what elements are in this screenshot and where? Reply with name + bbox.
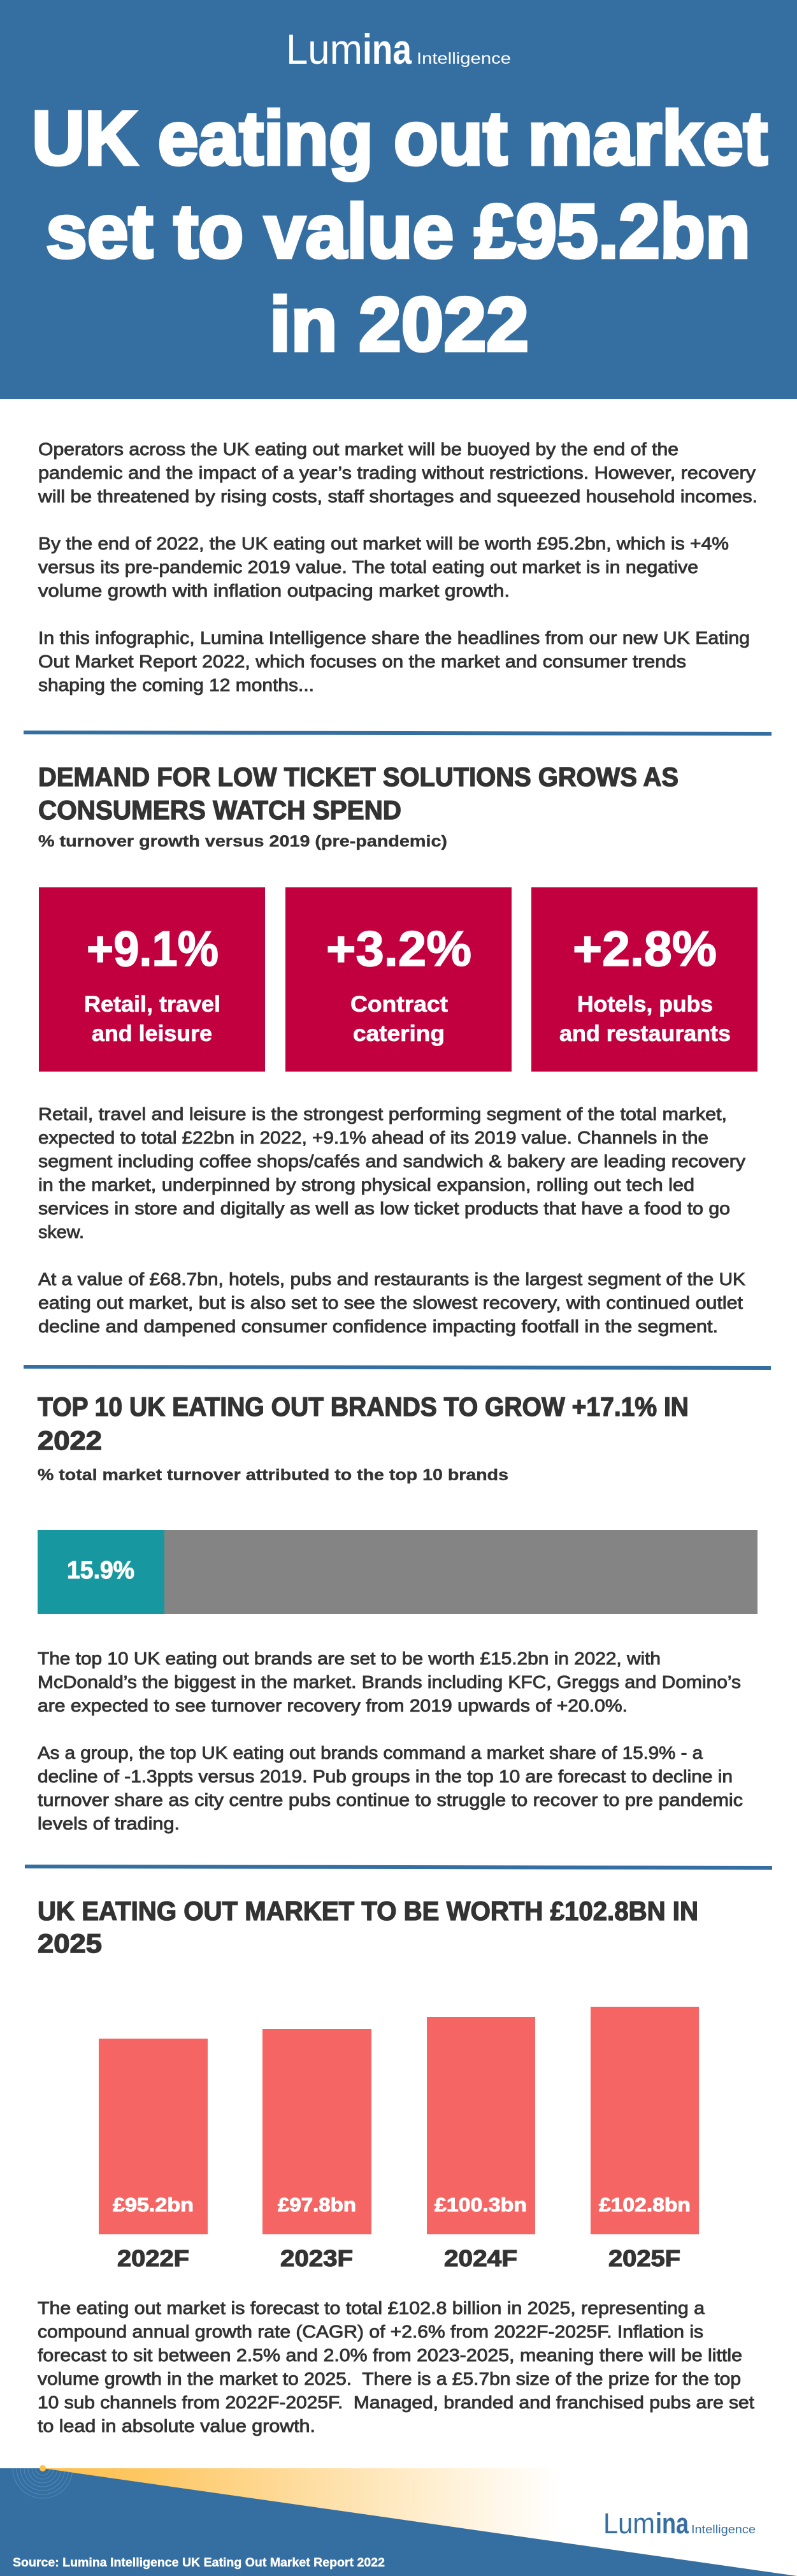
bar: 2025F: £102.8bn	[599, 2194, 691, 2216]
bar: 2022F: £95.2bn	[113, 2194, 194, 2216]
text block: segment commentary: eating out market, but is also set to see the slowest recovery, with continued outlet	[38, 1293, 743, 1313]
card: hotels, pubs and restaurants: +2.8%	[573, 921, 717, 977]
text block: forecast commentary: volume growth in the market to 2025. There is a £5.7bn size of the prize for the top	[38, 2369, 741, 2389]
text block: introduction: By the end of 2022, the UK eating out market will be worth £95.2bn, which is +4%	[38, 534, 729, 553]
title	[32, 96, 768, 367]
card: retail, travel and leisure	[39, 887, 265, 1072]
text block: brands commentary: turnover share as city centre pubs continue to struggle to recover to pre pandemic	[38, 1790, 743, 1810]
text block: brands commentary: As a group, the top UK eating out brands command a market share of 15.9% - a	[38, 1743, 703, 1763]
text block: introduction: Operators across the UK eating out market will be buoyed by the end of the	[38, 439, 679, 459]
card: contract catering: catering	[353, 1021, 445, 1046]
heading: market forecast	[38, 1896, 698, 1958]
card: hotels, pubs and restaurants	[531, 887, 758, 1072]
text block: introduction: Out Market Report 2022, which focuses on the market and consumer trends	[38, 651, 686, 671]
heading: demand for low ticket solutions: DEMAND FOR LOW TICKET SOLUTIONS GROWS AS	[38, 762, 679, 792]
bar: 2024F: £100.3bn	[434, 2194, 527, 2216]
card: contract catering	[285, 887, 512, 1072]
logo: Lumina Intelligence: Lum	[286, 25, 363, 73]
chart: market share bar	[38, 1530, 758, 1614]
source note: Source: Lumina Intelligence UK Eating Out Market Report 2022	[13, 2556, 385, 2570]
heading: demand for low ticket solutions: CONSUMERS WATCH SPEND	[38, 795, 401, 825]
title: UK eating out market	[32, 96, 768, 181]
icon: concentric circles	[13, 2468, 73, 2499]
heading: top 10 brands: 2022	[38, 1425, 102, 1455]
title: in 2022	[269, 282, 529, 367]
bar: 2023F: 2023F	[280, 2245, 353, 2271]
logo: Lumina Intelligence	[286, 25, 511, 73]
text block: brands commentary: decline of -1.3ppts versus 2019. Pub groups in the top 10 are forecast to decline in	[38, 1766, 733, 1786]
text block: introduction: versus its pre-pandemic 2019 value. The total eating out market is in negative	[38, 557, 698, 577]
bar: 2023F: £97.8bn	[278, 2194, 356, 2216]
text block: introduction: pandemic and the impact of a year’s trading without restrictions. However, recovery	[38, 463, 756, 483]
text block: forecast commentary: 10 sub channels from 2022F-2025F. Managed, branded and franchised pubs are set	[38, 2392, 754, 2412]
logo: footer Lumina Intelligence: Intelligence	[691, 2523, 756, 2536]
text block: segment commentary: At a value of £68.7bn, hotels, pubs and restaurants is the largest segment of the UK	[38, 1269, 745, 1289]
panel: footer	[0, 2465, 797, 2576]
text block: segment commentary: skew.	[38, 1222, 84, 1242]
title: set to value £95.2bn	[46, 189, 750, 274]
logo: Lumina Intelligence: Intelligence	[417, 50, 511, 68]
text block: brands commentary: McDonald’s the biggest in the market. Brands including KFC, Greggs and Domino’s	[38, 1672, 741, 1692]
text block: introduction: will be threatened by rising costs, staff shortages and squeezed household incomes.	[38, 486, 758, 506]
text block: introduction: shaping the coming 12 months...	[38, 675, 314, 695]
text block: introduction: In this infographic, Lumina Intelligence share the headlines from our new UK Eating	[38, 628, 750, 648]
card: retail, travel and leisure: +9.1%	[87, 921, 219, 977]
bar: 2024F	[427, 2017, 535, 2271]
card: retail, travel and leisure: Retail, travel	[84, 992, 220, 1017]
logo: footer Lumina Intelligence: Lum	[603, 2507, 655, 2540]
text block: segment commentary: decline and dampened consumer confidence impacting footfall in the segment.	[38, 1316, 718, 1336]
text block: introduction: volume growth with inflation outpacing market growth.	[38, 581, 510, 600]
panel: low ticket demand	[38, 762, 758, 1336]
logo: footer Lumina Intelligence: ina	[656, 2507, 689, 2540]
logo: Lumina Intelligence: ina	[363, 25, 412, 73]
logo: footer Lumina Intelligence	[603, 2507, 756, 2540]
panel: market forecast	[38, 1896, 754, 2436]
subheading: % turnover growth versus 2019 (pre-pandemic)	[38, 833, 447, 850]
text block: forecast commentary	[38, 2298, 754, 2436]
text block: segment commentary	[38, 1104, 745, 1336]
text block: introduction	[38, 439, 758, 695]
text block: forecast commentary: to lead in absolute value growth.	[38, 2416, 315, 2436]
heading: market forecast: UK EATING OUT MARKET TO BE WORTH £102.8BN IN	[38, 1896, 698, 1926]
card: retail, travel and leisure: and leisure	[92, 1021, 212, 1046]
heading: market forecast: 2025	[38, 1928, 102, 1958]
card: hotels, pubs and restaurants: and restaurants	[559, 1021, 731, 1046]
text block: segment commentary: expected to total £22bn in 2022, +9.1% ahead of its 2019 value. Channels in the	[38, 1128, 708, 1147]
text block: brands commentary: are expected to see turnover recovery from 2019 upwards of +20.0%.	[38, 1696, 628, 1715]
chart: forecast bars	[99, 2007, 699, 2271]
text block: brands commentary: levels of trading.	[38, 1814, 180, 1833]
text block: segment commentary: in the market, underpinned by strong physical expansion, rolling out tech led	[38, 1175, 694, 1195]
heading: demand for low ticket solutions	[38, 762, 679, 825]
heading: top 10 brands	[38, 1392, 689, 1455]
text block: brands commentary	[38, 1648, 743, 1833]
text block: forecast commentary: compound annual growth rate (CAGR) of +2.6% from 2022F-2025F. Inflation is	[38, 2322, 703, 2341]
bar: 2022F: 2022F	[117, 2245, 189, 2271]
bar: 2024F: 2024F	[444, 2245, 517, 2271]
text block: forecast commentary: The eating out market is forecast to total £102.8 billion in 2025, representing a	[38, 2298, 705, 2318]
panel: header banner	[0, 0, 797, 399]
subheading: % total market turnover attributed to the top 10 brands	[38, 1466, 508, 1484]
text block: segment commentary: segment including coffee shops/cafés and sandwich & bakery are leading recovery	[38, 1151, 745, 1171]
card: contract catering: Contract	[350, 992, 448, 1017]
chart: market share bar: 15.9%	[67, 1557, 134, 1584]
bar: 2023F	[262, 2029, 371, 2271]
bar: 2022F	[99, 2039, 208, 2271]
panel: top 10 brands	[38, 1392, 758, 1833]
card: hotels, pubs and restaurants: Hotels, pubs	[577, 992, 713, 1017]
bar: 2025F	[591, 2007, 699, 2271]
text block: brands commentary: The top 10 UK eating out brands are set to be worth £15.2bn in 2022, with	[38, 1648, 661, 1668]
heading: top 10 brands: TOP 10 UK EATING OUT BRANDS TO GROW +17.1% IN	[38, 1392, 689, 1422]
icon: yellow dot	[39, 2465, 46, 2471]
text block: forecast commentary: forecast to sit between 2.5% and 2.0% from 2023-2025, meaning there will be little	[38, 2345, 742, 2365]
text block: segment commentary: Retail, travel and leisure is the strongest performing segment of the total market,	[38, 1104, 727, 1124]
text block: segment commentary: services in store and digitally as well as low ticket products that have a food to go	[38, 1198, 730, 1218]
card: contract catering: +3.2%	[326, 921, 471, 977]
bar: 2025F: 2025F	[608, 2245, 680, 2271]
